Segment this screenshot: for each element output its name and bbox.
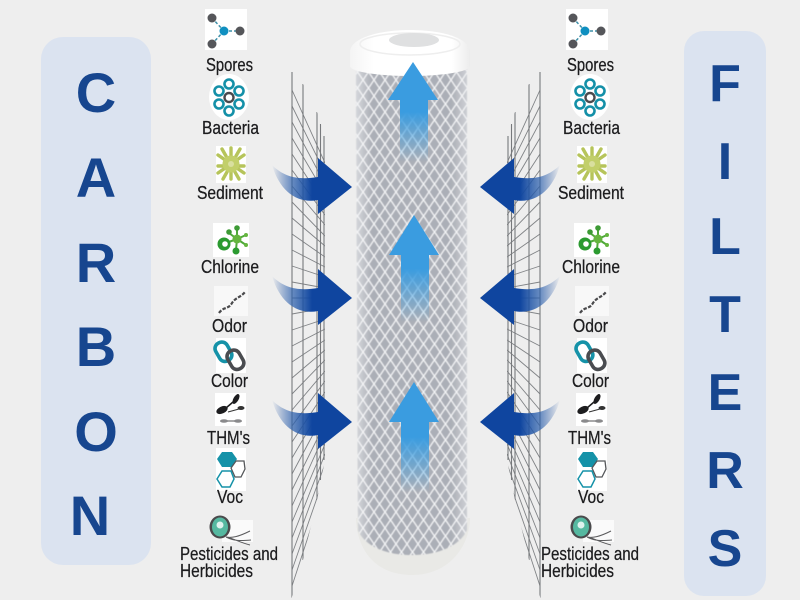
icon: VOC <box>577 448 607 491</box>
heading letters: FILTERS: T <box>709 286 741 344</box>
label: THMs: THM's <box>207 428 250 448</box>
icon: VOC <box>216 448 246 491</box>
right arrow 1 <box>480 158 560 214</box>
icon: chlorine <box>574 223 610 257</box>
icon: spores <box>205 9 247 50</box>
heading letters: FILTERS: R <box>706 442 744 500</box>
icon: pesticides <box>210 516 253 545</box>
icon: odor <box>575 286 609 316</box>
heading letters: FILTERS: L <box>709 208 741 266</box>
panel: CARBON <box>41 37 151 565</box>
label: spores: Spores <box>567 55 614 75</box>
label: pesticides and herbicides: Pesticides and <box>541 544 639 564</box>
left arrow 3 <box>272 393 352 449</box>
label: pesticides and herbicides: Pesticides and <box>180 544 278 564</box>
icon: bacteria <box>570 74 610 120</box>
heading letters: FILTERS <box>706 55 744 578</box>
left arrow 2 <box>272 269 352 325</box>
heading letters: CARBON: B <box>76 315 116 378</box>
label: pesticides and herbicides <box>180 544 278 581</box>
heading letters: CARBON: C <box>76 61 116 124</box>
icon: sediment <box>216 146 246 183</box>
icon: chlorine <box>213 223 249 257</box>
right wire mesh <box>507 72 540 598</box>
heading letters: FILTERS: E <box>708 364 742 422</box>
icon: spores <box>566 9 608 50</box>
left arrow 1 <box>272 158 352 214</box>
icon: bacteria <box>209 74 249 120</box>
up arrow: middle <box>389 215 439 322</box>
left contaminant list <box>180 9 278 581</box>
label: color: Color <box>211 371 248 391</box>
filter cartridge <box>350 30 470 575</box>
label: chlorine: Chlorine <box>562 257 620 277</box>
icon: THMs <box>215 393 246 426</box>
label: pesticides and herbicides: Herbicides <box>541 561 614 581</box>
icon: pesticides <box>570 516 614 545</box>
label: pesticides and herbicides: Herbicides <box>180 561 253 581</box>
heading letters: CARBON: N <box>70 484 110 547</box>
heading letters: CARBON: O <box>74 400 118 463</box>
heading letters: FILTERS: S <box>708 520 742 578</box>
right contaminant list <box>541 9 639 581</box>
icon: THMs <box>576 393 607 426</box>
label: bacteria: Bacteria <box>202 118 260 138</box>
label: THMs: THM's <box>568 428 611 448</box>
label: chlorine: Chlorine <box>201 257 259 277</box>
label: sediment: Sediment <box>558 183 624 203</box>
heading letters: FILTERS: I <box>718 133 732 191</box>
label: sediment: Sediment <box>197 183 263 203</box>
top cap <box>350 30 470 76</box>
label: VOC: Voc <box>578 487 604 507</box>
icon: color <box>213 338 246 373</box>
label: spores: Spores <box>206 55 253 75</box>
right arrow 2 <box>480 269 560 325</box>
label: odor: Odor <box>212 316 247 336</box>
heading letters: CARBON: R <box>76 231 116 294</box>
heading letters: FILTERS: F <box>709 55 741 113</box>
label: bacteria: Bacteria <box>563 118 621 138</box>
label: pesticides and herbicides <box>541 544 639 581</box>
label: VOC: Voc <box>217 487 243 507</box>
label: odor: Odor <box>573 316 608 336</box>
left wire mesh <box>292 72 325 598</box>
heading letters: CARBON: A <box>76 146 116 209</box>
panel: FILTERS <box>684 31 766 596</box>
icon: color <box>574 338 607 373</box>
carbon mesh body <box>356 60 467 555</box>
label: color: Color <box>572 371 609 391</box>
right arrow 3 <box>480 393 560 449</box>
icon: sediment <box>577 146 607 183</box>
bottom cap <box>356 518 470 575</box>
up arrow: bottom <box>389 382 439 492</box>
icon: odor <box>214 286 248 316</box>
up arrow: top <box>388 62 438 162</box>
heading letters: CARBON <box>70 61 118 547</box>
